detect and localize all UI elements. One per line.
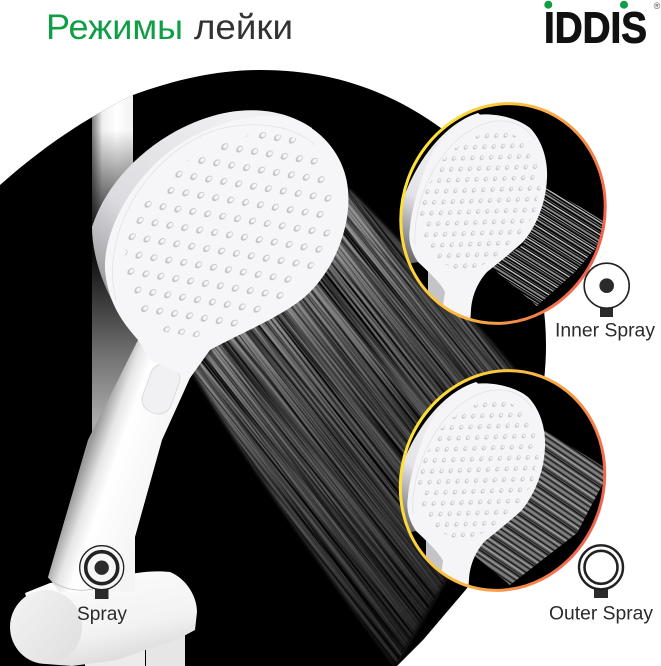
- spray nozzles: [120, 128, 335, 340]
- inner spray jets: [492, 188, 603, 306]
- label: Inner Spray: Inner Spray: [555, 321, 655, 342]
- title: лейки: [194, 8, 293, 47]
- inset: outer spray mode: [398, 369, 606, 592]
- inset: inner spray mode: [399, 102, 607, 325]
- logo: IDDIS: IDDIS: [544, 5, 647, 53]
- title: [46, 8, 293, 47]
- icon: outer spray: [579, 545, 623, 598]
- shower head body: [92, 110, 348, 378]
- icon: inner spray: [584, 263, 629, 317]
- slide bar pole: [92, 95, 138, 432]
- logo: IDDIS: ®: [654, 1, 661, 11]
- title: Режимы: [46, 8, 183, 47]
- main photo: black backdrop with shower head: [0, 60, 560, 666]
- label: Spray: Spray: [77, 604, 127, 625]
- black backdrop: [0, 60, 560, 666]
- water spray: [193, 190, 545, 666]
- label: Outer Spray: Outer Spray: [549, 602, 653, 624]
- wall bracket: [10, 571, 197, 666]
- outer spray jets: [475, 430, 604, 585]
- icon: spray: [80, 546, 124, 599]
- handle: [48, 340, 210, 592]
